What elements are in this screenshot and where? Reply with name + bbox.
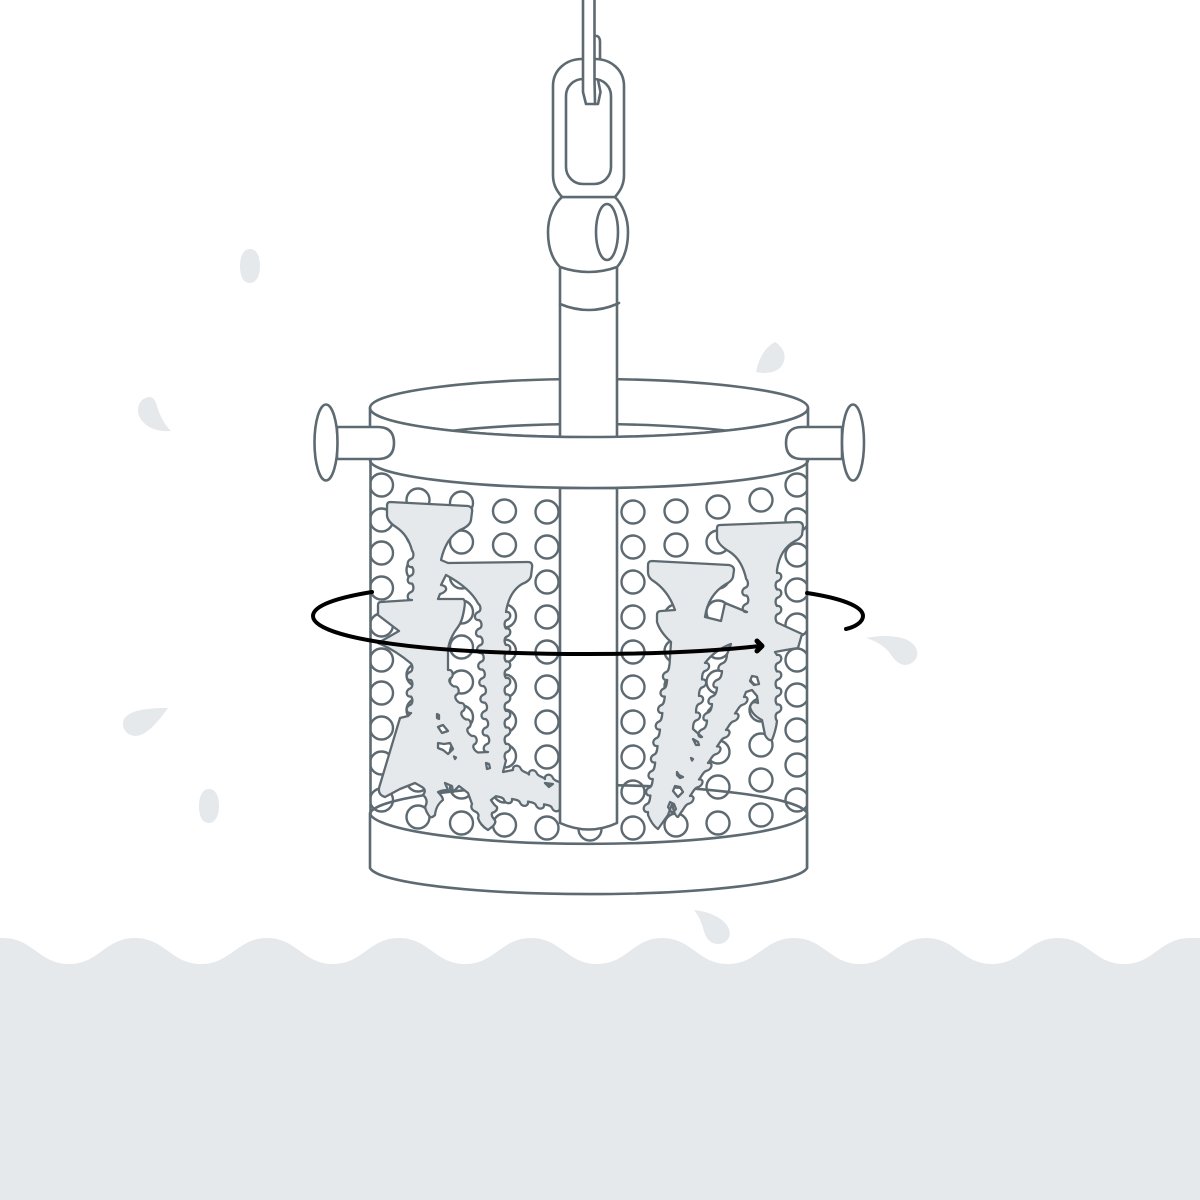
droplet	[866, 636, 917, 665]
collar line	[560, 303, 619, 310]
left pin handle	[314, 404, 394, 480]
rotation arrow	[313, 592, 863, 654]
water surface	[0, 938, 1200, 1200]
rear tab seen through link	[595, 80, 600, 104]
central tube, lower part	[560, 488, 617, 830]
arrow head	[757, 641, 762, 651]
pin shaft	[337, 427, 394, 459]
arrow shaft	[313, 592, 760, 654]
pin shaft	[786, 427, 842, 459]
pin cap	[842, 404, 864, 480]
basket rim band, front	[370, 408, 808, 488]
rim opening	[370, 379, 808, 437]
hanger strap	[583, 0, 595, 104]
inner back arc of rim	[450, 424, 730, 431]
inner link opening	[566, 79, 611, 184]
basket side walls	[370, 460, 807, 868]
swivel hook assembly	[548, 0, 628, 272]
droplet	[199, 789, 219, 823]
water droplets	[123, 249, 917, 944]
screws: left cluster	[378, 502, 565, 830]
upper tube	[560, 262, 617, 440]
basket floor back edge	[370, 785, 807, 813]
pin cap	[314, 404, 338, 480]
right pin handle	[786, 404, 864, 480]
ball side hole	[596, 204, 618, 260]
droplet	[694, 910, 730, 944]
droplet	[138, 397, 171, 431]
central shaft with collar	[560, 262, 619, 440]
basket rim, back	[370, 379, 808, 437]
perforation holes	[370, 474, 808, 840]
screws: right cluster	[644, 522, 803, 829]
droplet	[240, 249, 260, 283]
outer link	[553, 59, 624, 197]
droplet	[123, 708, 168, 736]
rear hanger tab	[594, 36, 600, 64]
basket base band	[370, 814, 807, 894]
swivel ball	[548, 197, 628, 272]
arrow tail behind basket	[807, 593, 863, 629]
droplet	[756, 342, 785, 373]
